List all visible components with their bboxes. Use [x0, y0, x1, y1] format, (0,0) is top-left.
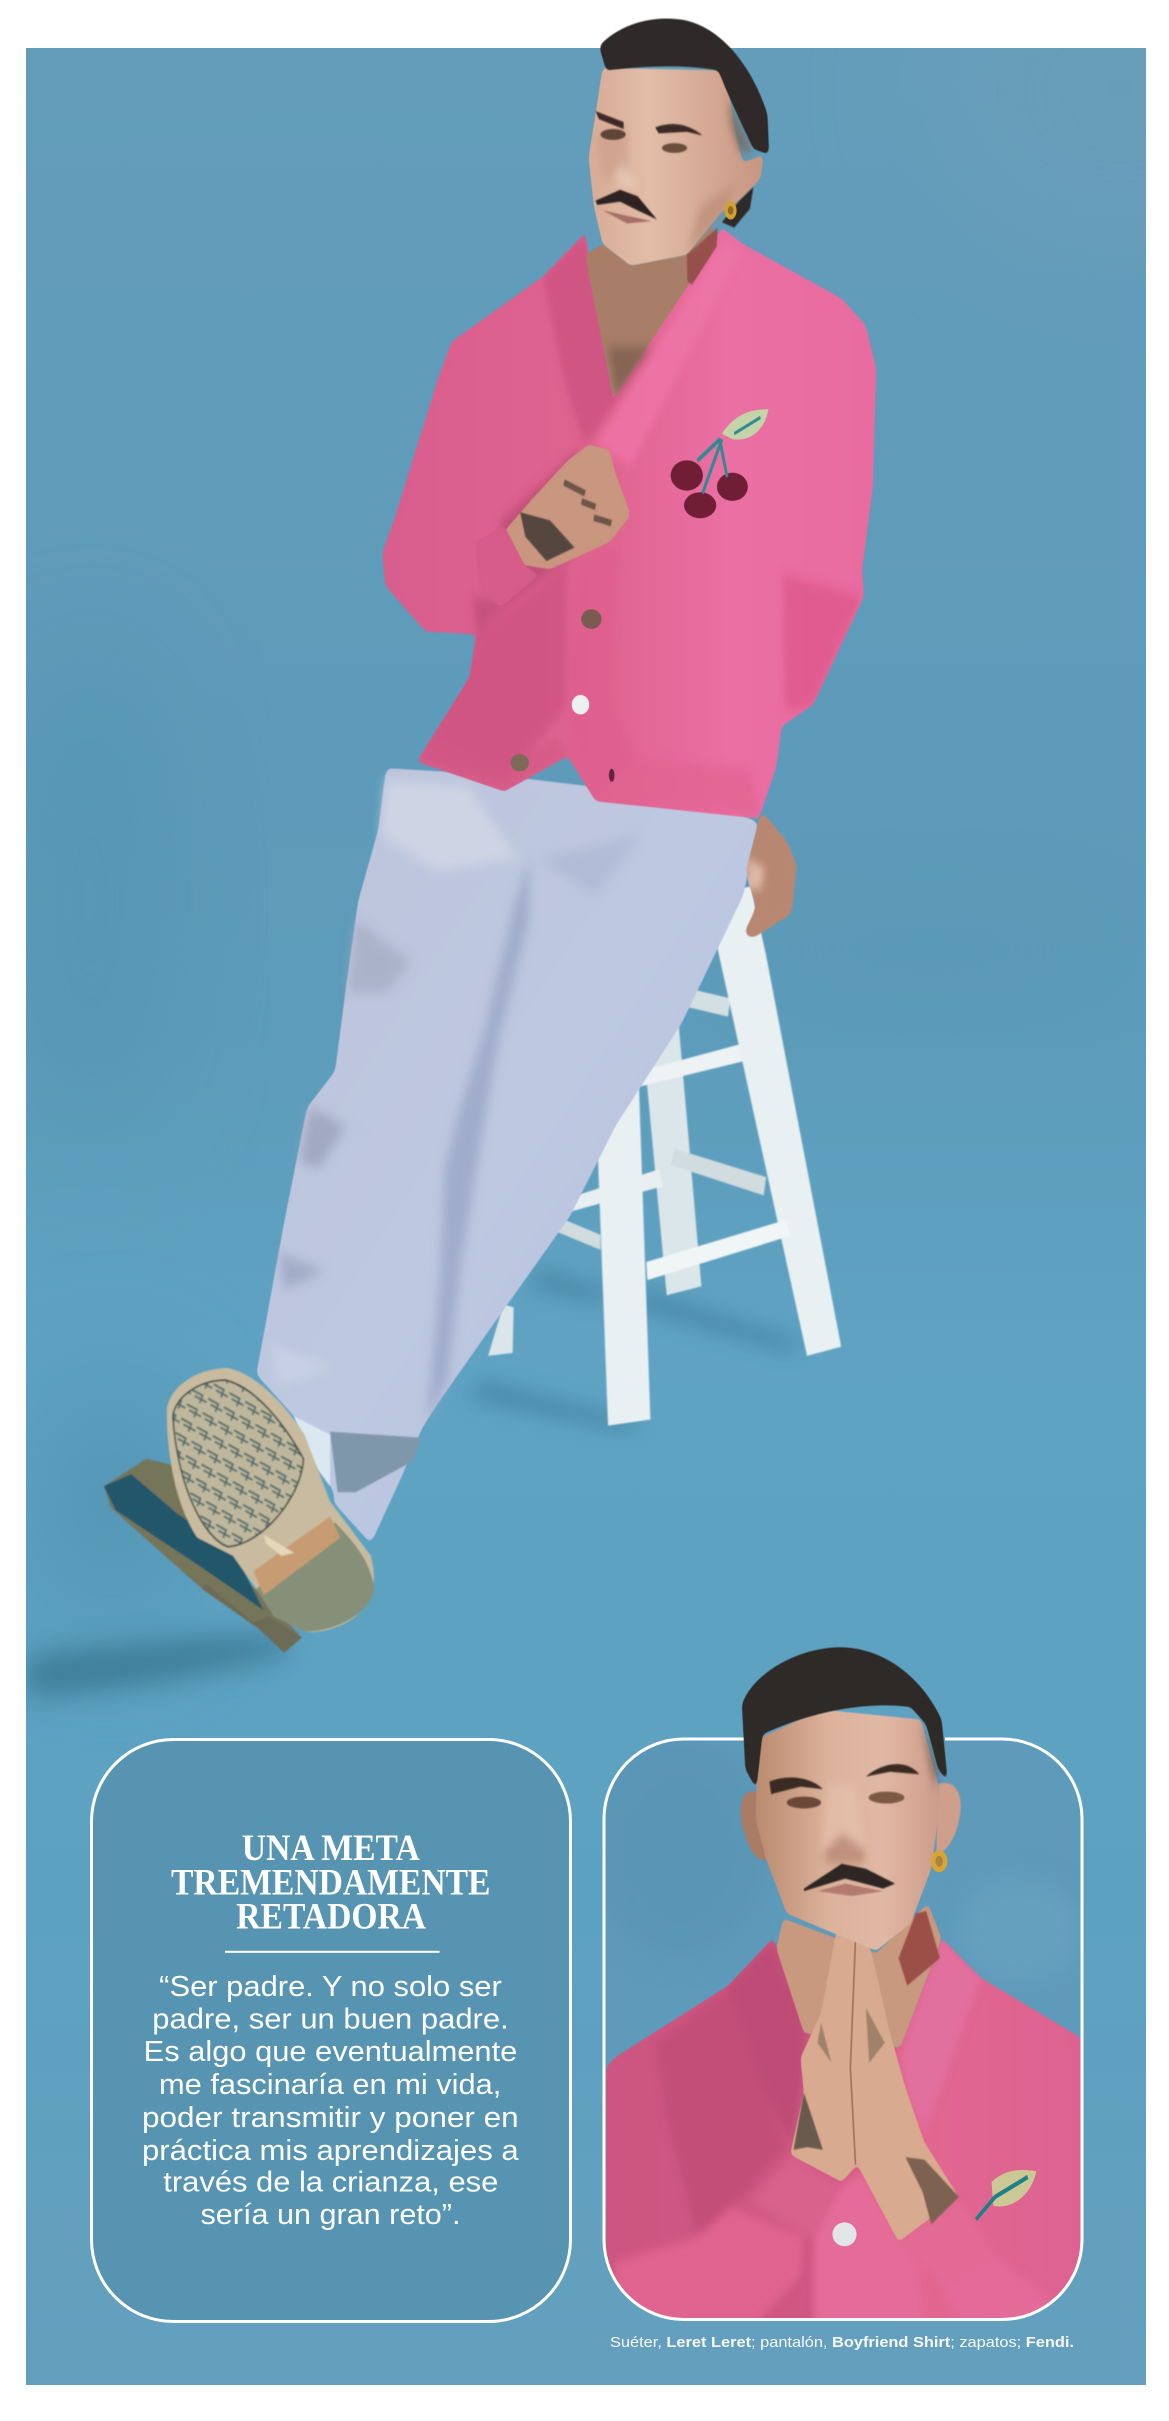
face: [756, 1710, 938, 1951]
cardigan buttons: [581, 609, 602, 629]
neck tattoo: [899, 1911, 940, 1986]
moustache and mouth: [596, 190, 657, 220]
nose shadow: [823, 1834, 866, 1864]
quote text: sería un gran reto”.: [200, 2199, 460, 2231]
portrait head overlapping frame: [741, 1647, 961, 1951]
portrait card: [590, 1647, 1083, 2326]
quote card: [92, 1740, 570, 2322]
heading: RETADORA: [236, 1896, 426, 1938]
portrait background: [603, 1739, 1083, 2320]
quote text: “Ser padre. Y no solo ser: [159, 1971, 502, 2003]
main figure: man seated on stool: [104, 19, 876, 1653]
eyes and eyebrows: [596, 111, 624, 129]
quote text: padre, ser un buen padre.: [152, 2004, 509, 2036]
white wooden stool: [488, 886, 841, 1426]
hand holding cardigan with tattoos: [504, 445, 631, 569]
cardigan body: [382, 228, 876, 819]
heading: TREMENDAMENTE: [171, 1862, 490, 1903]
portrait white frame: [604, 1739, 1082, 2320]
stool shadows: [470, 1270, 800, 1432]
moustache and lips: [804, 1864, 895, 1891]
sleeve cuff: [475, 526, 539, 607]
portrait sweater and hands: [606, 1904, 1081, 2326]
quote text: través de la crianza, ese: [163, 2167, 498, 2199]
portrait button and leaf embroidery: [832, 2222, 857, 2246]
heading: [171, 1828, 490, 1938]
quote text: [142, 1971, 520, 2231]
quote text: práctica mis aprendizajes a: [142, 2135, 520, 2167]
floor shadow: [26, 1635, 285, 1698]
portrait neck: [776, 1904, 942, 2048]
shoes with patterned soles: [104, 1368, 374, 1653]
eyebrows and eyes: [769, 1777, 823, 1794]
gold earring: [725, 201, 737, 220]
gold earring: [931, 1850, 947, 1872]
hair: [599, 19, 769, 154]
cherry embroidery: [671, 409, 769, 518]
quote text: me fascinaría en mi vida,: [159, 2069, 501, 2101]
pink cardigan, neck and face: [382, 19, 876, 819]
neck skin: [585, 217, 720, 398]
heading: UNA META: [242, 1828, 420, 1869]
striped trousers: [256, 768, 759, 1544]
face: [589, 68, 764, 266]
praying hands: [790, 1931, 959, 2242]
hair: [742, 1647, 948, 1789]
quote text: poder transmitir y poner en: [142, 2102, 519, 2134]
hand resting on stool: [743, 811, 797, 938]
quote text: Es algo que eventualmente: [144, 2036, 517, 2068]
ears: [741, 1791, 768, 1860]
credits caption: Suéter, Leret Leret ; pantalón, Boyfriend Shirt ; zapatos; Fendi.: [610, 2335, 1074, 2351]
